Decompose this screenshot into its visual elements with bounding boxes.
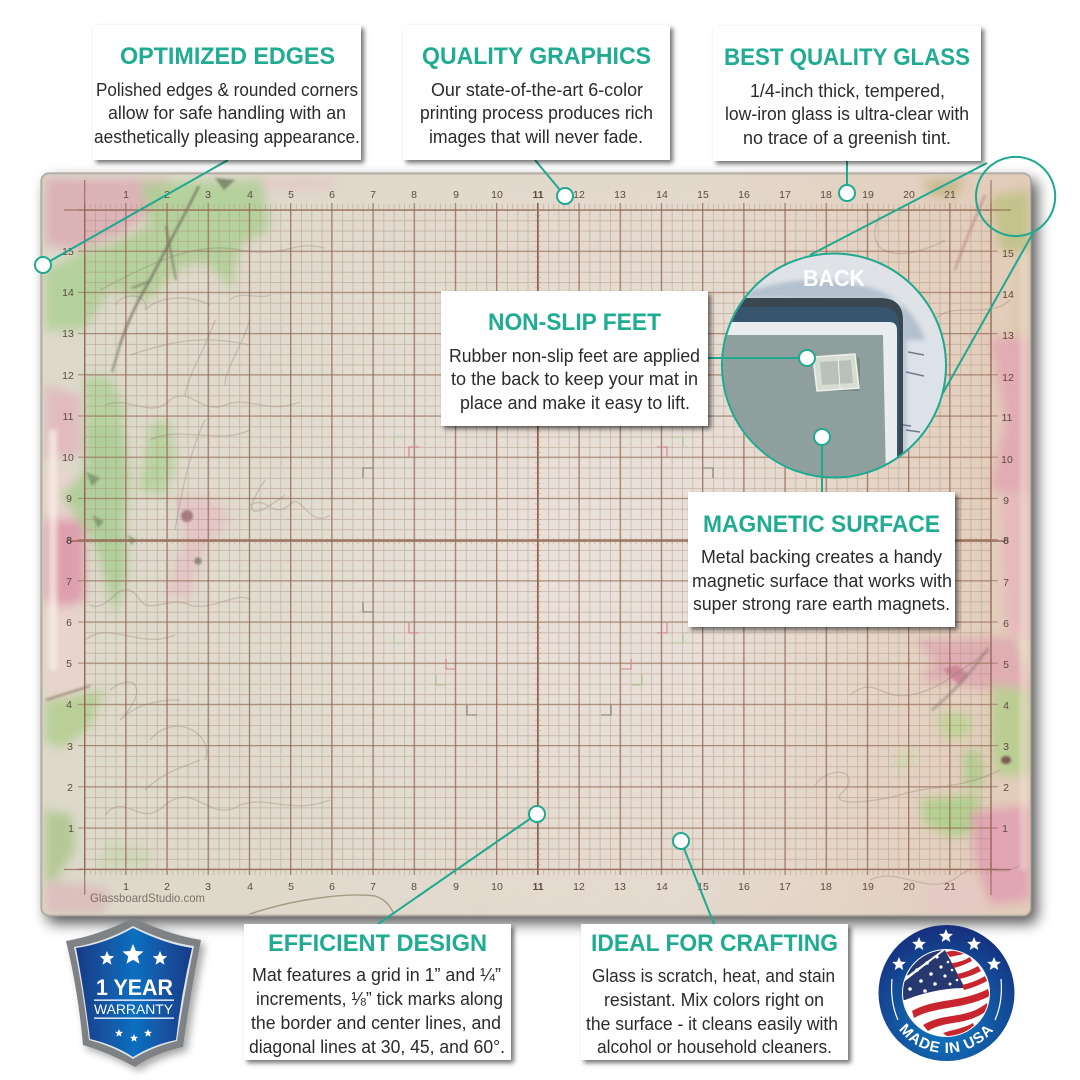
non-slip rubber foot: [813, 354, 860, 391]
callout line: quality graphics: [535, 160, 573, 204]
ruler numbers right: 5: [1003, 659, 1009, 671]
text: magnetic surface body: super strong rare earth magnets.: [693, 594, 950, 614]
ruler numbers bottom: 9: [453, 881, 459, 893]
major inch grid horizontal: [78, 209, 998, 870]
ruler numbers top: 1: [123, 189, 129, 201]
text: efficient design body: increments, ⅛” tick marks along: [256, 989, 503, 1009]
ruler numbers left: 12: [62, 370, 74, 382]
ruler numbers bottom: 19: [862, 881, 874, 893]
text: ideal for crafting body: resistant. Mix colors right on: [604, 990, 824, 1010]
callout line: best quality glass: [839, 161, 855, 201]
ruler numbers top: 8: [411, 189, 417, 201]
badge: 1 year warranty shield: WARRANTY: [94, 1001, 174, 1017]
text: non-slip feet body: place and make it easy to lift.: [460, 393, 690, 413]
ruler numbers top: 9: [453, 189, 459, 201]
handwritten script flourishes: [85, 215, 1020, 918]
ruler numbers bottom: 10: [491, 881, 503, 893]
ruler numbers left: 10: [62, 452, 74, 464]
ruler numbers bottom: [124, 883, 956, 890]
ruler numbers top: 15: [697, 189, 709, 201]
ruler numbers bottom: 11: [532, 881, 544, 893]
text: best quality glass body: low-iron glass is ultra-clear with: [725, 104, 969, 124]
ruler numbers left: 2: [67, 782, 73, 794]
text: ideal for crafting body: [586, 966, 838, 1057]
ruler numbers right: 12: [1002, 372, 1014, 384]
quarter-inch grid: [85, 210, 991, 869]
magnifier: corner zoom ring: [700, 157, 1055, 480]
badge: made in USA: [878, 925, 1014, 1061]
ruler numbers right: 14: [1002, 289, 1014, 301]
flag: [903, 950, 989, 1036]
magnifier: back of board photo: [723, 254, 945, 476]
text: ideal for crafting body: alcohol or household cleaners.: [597, 1037, 832, 1057]
text: magnetic surface body: [692, 547, 952, 614]
ruler numbers right: 13: [1002, 330, 1014, 342]
BACK label: BACK: [803, 265, 865, 291]
text: quality graphics body: Our state-of-the-art 6-color: [431, 80, 643, 100]
ruler numbers right: 7: [1003, 577, 1009, 589]
text: optimized edges body: allow for safe handling with an: [108, 103, 346, 123]
magnifier tangent lines: [810, 163, 1033, 393]
text: efficient design body: Mat features a grid in 1” and ¼”: [252, 965, 501, 985]
eighth-inch tick marks: [84, 204, 992, 210]
ruler numbers bottom: 13: [614, 881, 626, 893]
badge text: MADE IN USA: MADE IN USA: [899, 1023, 994, 1053]
text: optimized edges body: [94, 80, 360, 147]
panel: optimized edges: [93, 25, 361, 160]
ruler numbers bottom: 16: [738, 881, 750, 893]
text: efficient design body: diagonal lines at 30, 45, and 60°.: [249, 1037, 505, 1057]
ruler numbers bottom: 7: [370, 881, 376, 893]
text: optimized edges body: aesthetically pleasing appearance.: [94, 127, 360, 147]
ruler numbers top: 14: [656, 189, 668, 201]
text: non-slip feet body: [449, 346, 700, 413]
registration corner marks: [363, 437, 713, 715]
text: non-slip feet body: Rubber non-slip feet are applied: [449, 346, 700, 366]
text: optimized edges body: Polished edges & rounded corners: [96, 80, 358, 100]
text: ideal for crafting body: Glass is scratch, heat, and stain: [592, 966, 835, 986]
text: non-slip feet body: to the back to keep your mat in: [451, 369, 698, 389]
ruler numbers top: 13: [614, 189, 626, 201]
ruler numbers top: 4: [247, 189, 253, 201]
ruler numbers right: [1001, 248, 1014, 835]
badge: 1 year warranty shield: [66, 918, 201, 1067]
ruler numbers top: 17: [779, 189, 791, 201]
ruler numbers bottom: 21: [944, 881, 956, 893]
callout line: ideal for crafting: [673, 833, 714, 924]
panel: magnetic surface: [688, 492, 955, 627]
text: magnetic surface body: magnetic surface that works with: [692, 571, 952, 591]
ruler numbers right: 3: [1003, 741, 1009, 753]
text: quality graphics body: printing process produces rich: [420, 103, 653, 123]
ruler numbers left: 6: [66, 617, 72, 629]
heading: efficient design: EFFICIENT DESIGN: [268, 930, 487, 957]
ruler numbers right: 2: [1003, 782, 1009, 794]
ruler numbers bottom: 2: [164, 881, 170, 893]
ruler numbers bottom: 1: [123, 881, 129, 893]
ruler numbers top: 12: [573, 189, 585, 201]
ruler numbers left: 15: [62, 246, 74, 258]
board glass edge: [41, 173, 1031, 916]
ruler numbers left: 9: [66, 493, 72, 505]
heading: quality graphics: QUALITY GRAPHICS: [422, 43, 651, 70]
ruler numbers top: 3: [205, 189, 211, 201]
ruler numbers left: [62, 246, 74, 835]
ruler numbers right: 1: [1002, 823, 1008, 835]
ruler numbers right: 9: [1003, 495, 1009, 507]
ruler numbers left: 14: [62, 287, 74, 299]
ruler numbers bottom: 5: [288, 881, 294, 893]
ruler numbers left: 8: [66, 535, 72, 547]
ruler numbers right: 4: [1003, 700, 1009, 712]
callout line: efficient design: [378, 806, 545, 924]
ruler numbers left: 4: [66, 699, 72, 711]
ruler numbers left: 1: [68, 823, 74, 835]
callout line: optimized edges: [35, 160, 228, 273]
ruler numbers bottom: 15: [697, 881, 709, 893]
ruler numbers bottom: 14: [656, 881, 668, 893]
ruler numbers bottom: 12: [573, 881, 585, 893]
ruler numbers top: 21: [944, 189, 956, 201]
ruler numbers top: [124, 191, 956, 198]
ruler numbers bottom: 8: [411, 881, 417, 893]
ruler numbers bottom: 17: [779, 881, 791, 893]
warranty stars: [100, 944, 167, 1042]
ruler numbers left: 3: [67, 741, 73, 753]
text: ideal for crafting body: the surface - it cleans easily with: [586, 1014, 838, 1034]
ruler numbers top: 10: [491, 189, 503, 201]
text: quality graphics body: images that will never fade.: [429, 127, 643, 147]
callout line: magnetic surface: [814, 429, 830, 492]
text: best quality glass body: 1/4-inch thick, tempered,: [750, 81, 945, 101]
ruler numbers left: 5: [66, 658, 72, 670]
ruler numbers bottom: 6: [329, 881, 335, 893]
heading: optimized edges: OPTIMIZED EDGES: [120, 43, 335, 70]
text: efficient design body: the border and center lines, and: [251, 1013, 501, 1033]
floral watercolor washes: [45, 178, 1030, 914]
ruler numbers top: 20: [903, 189, 915, 201]
border extension lines: [64, 180, 1011, 895]
badge stars: [892, 929, 1001, 970]
watermark: GlassboardStudio.com: GlassboardStudio.com: [90, 891, 205, 905]
ruler numbers top: 7: [370, 189, 376, 201]
ruler numbers top: 5: [288, 189, 294, 201]
centre lines: [537, 203, 539, 875]
ruler numbers right: 6: [1003, 618, 1009, 630]
text: magnetic surface body: Metal backing creates a handy: [701, 547, 942, 567]
board artwork: [43, 175, 1030, 918]
panel: best quality glass: [713, 26, 981, 161]
text: efficient design body: [249, 965, 505, 1057]
ruler numbers top: 18: [820, 189, 832, 201]
ruler numbers bottom: 3: [205, 881, 211, 893]
ruler numbers bottom: 4: [247, 881, 253, 893]
text: best quality glass body: [725, 81, 969, 148]
ruler numbers top: 11: [532, 189, 544, 201]
ruler numbers bottom: 20: [903, 881, 915, 893]
panel: efficient design: [244, 924, 511, 1060]
ruler numbers left: 11: [63, 411, 74, 423]
text: quality graphics body: [420, 80, 653, 147]
warranty text: 1 YEAR: [96, 975, 173, 1000]
ruler numbers top: 2: [164, 189, 170, 201]
heading: best quality glass: BEST QUALITY GLASS: [724, 44, 970, 71]
callout line: non-slip feet: [708, 350, 815, 366]
ruler numbers right: 8: [1003, 535, 1009, 547]
ruler numbers bottom: 18: [820, 881, 832, 893]
heading: non-slip feet: NON-SLIP FEET: [488, 309, 661, 336]
text: best quality glass body: no trace of a greenish tint.: [743, 128, 951, 148]
ruler numbers top: 6: [329, 189, 335, 201]
ruler numbers top: 19: [862, 189, 874, 201]
panel: quality graphics: [403, 25, 670, 160]
ruler numbers left: 7: [66, 576, 72, 588]
bright glass edge highlights: [49, 430, 57, 670]
ruler numbers right: 11: [1002, 412, 1013, 424]
ruler numbers right: 15: [1002, 248, 1014, 260]
panel: ideal for crafting: [581, 924, 848, 1060]
panel: non-slip feet: [441, 291, 708, 426]
heading: ideal for crafting: IDEAL FOR CRAFTING: [591, 930, 838, 957]
major inch grid vertical: [84, 203, 992, 875]
glass cutting mat board: [41, 173, 1031, 918]
heading: magnetic surface: MAGNETIC SURFACE: [703, 511, 940, 538]
ruler numbers top: 16: [738, 189, 750, 201]
rose and leaf details: [46, 178, 1011, 764]
ruler numbers left: 13: [62, 328, 74, 340]
ruler numbers right: 10: [1001, 454, 1013, 466]
